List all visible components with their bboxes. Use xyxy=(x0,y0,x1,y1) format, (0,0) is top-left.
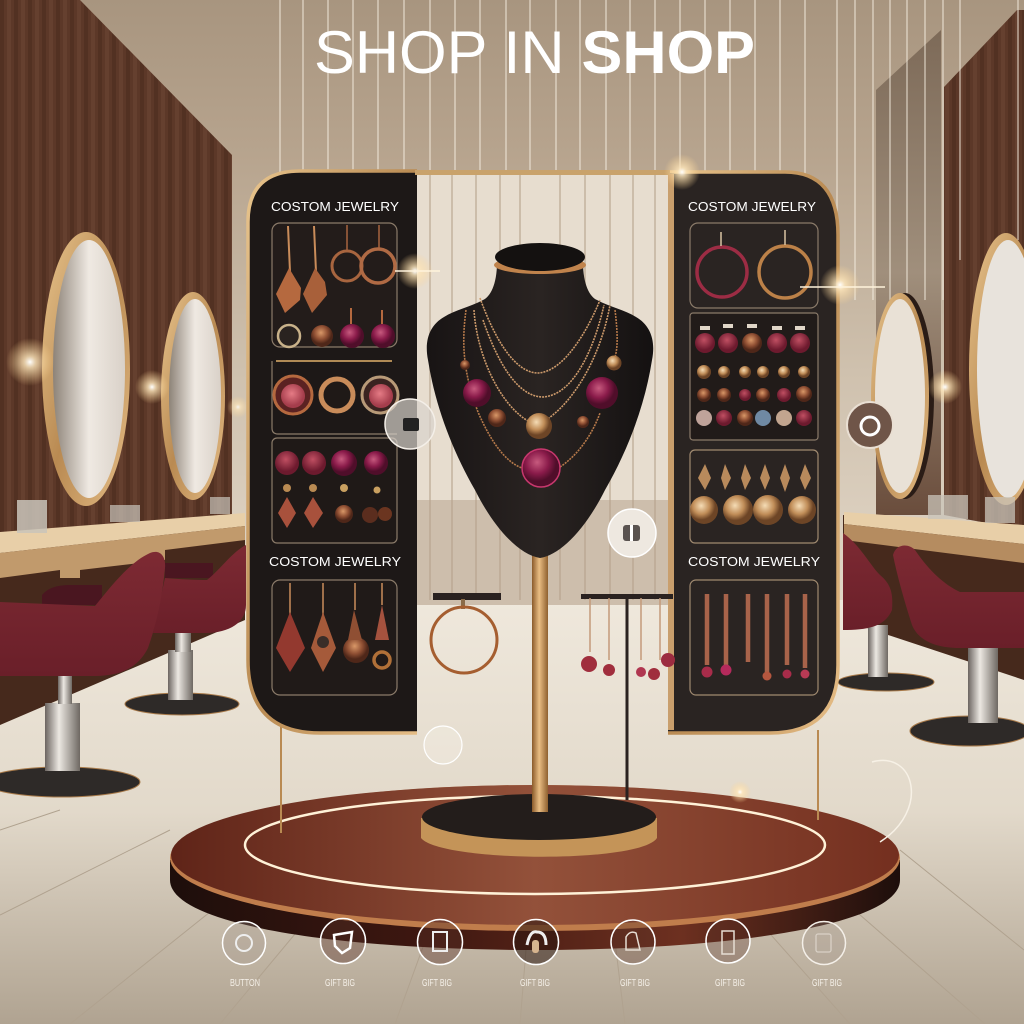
icon labels: GIFT BIG xyxy=(812,978,842,989)
bead tray xyxy=(690,313,818,440)
icon labels: GIFT BIG xyxy=(620,978,650,989)
support rods xyxy=(281,725,818,833)
right mirrors xyxy=(871,233,1024,505)
right counter xyxy=(844,495,1024,563)
chair: front right xyxy=(893,546,1024,746)
tray divider xyxy=(276,360,392,362)
earring tray 2 xyxy=(272,361,398,434)
chair: back left xyxy=(125,545,246,715)
wall lamps xyxy=(6,338,962,418)
panel label: bottom right: COSTOM JEWELRY xyxy=(688,555,821,569)
right wood wall xyxy=(944,10,1024,530)
under-counter wall right xyxy=(843,515,1024,680)
centre back panel with light stripes xyxy=(415,175,670,605)
necklace display stand xyxy=(421,243,657,857)
under-counter wall left xyxy=(0,515,245,725)
stand base xyxy=(421,794,657,857)
panel label: top left: COSTOM JEWELRY xyxy=(271,200,400,214)
flare lights xyxy=(395,154,885,803)
floating badge: right xyxy=(847,402,893,448)
chair: front left xyxy=(0,552,165,797)
left mirrors xyxy=(42,232,225,506)
earring tray 3 xyxy=(272,438,397,543)
stand pole xyxy=(532,555,548,812)
left counter xyxy=(0,497,245,578)
bust xyxy=(427,262,653,558)
small hoop stand xyxy=(431,593,501,673)
icon 1 xyxy=(222,922,266,964)
right mid wall xyxy=(876,30,941,515)
earring rail stand xyxy=(581,594,675,800)
icon labels: GIFT BIG xyxy=(520,978,550,989)
icon 2 xyxy=(320,918,366,964)
icon labels: GIFT BIG xyxy=(422,978,452,989)
layered necklaces xyxy=(464,298,617,468)
left display panel xyxy=(248,171,417,733)
background: floor xyxy=(0,600,1024,1024)
icon 6 xyxy=(706,919,750,963)
icon labels: GIFT BIG xyxy=(715,978,745,989)
floating ring: floor xyxy=(424,726,462,764)
icon row xyxy=(222,918,846,964)
icon 7 xyxy=(802,922,846,964)
panel label: top right: COSTOM JEWELRY xyxy=(688,200,817,214)
icon 5 xyxy=(611,920,655,964)
floating badge: left xyxy=(385,399,435,449)
bust neck cap xyxy=(494,243,586,274)
hanging light strands xyxy=(280,0,1018,300)
icon labels: GIFT BIG xyxy=(325,978,355,989)
top gold frame bar xyxy=(415,170,670,175)
chair: back right xyxy=(838,533,934,691)
panel label: bottom left: COSTOM JEWELRY xyxy=(269,555,402,569)
floating badge: centre xyxy=(608,509,656,557)
title: SHOP IN SHOP xyxy=(314,19,755,86)
platform xyxy=(170,785,900,950)
icon labels xyxy=(230,978,842,989)
icon 3 xyxy=(418,920,462,964)
background: ceiling and back wall xyxy=(0,0,1024,620)
gold drop tray xyxy=(690,450,818,543)
left wood wall xyxy=(0,0,232,545)
hoop tray xyxy=(690,223,818,308)
necklace pendants xyxy=(460,356,622,487)
right display panel xyxy=(668,172,838,733)
earring tray 4 xyxy=(272,580,397,695)
earring tray 1 xyxy=(272,223,397,348)
icon 4 xyxy=(514,920,558,964)
floating ring arc xyxy=(872,760,911,842)
icon labels: BUTTON xyxy=(230,978,260,989)
long drop tray xyxy=(690,580,818,695)
